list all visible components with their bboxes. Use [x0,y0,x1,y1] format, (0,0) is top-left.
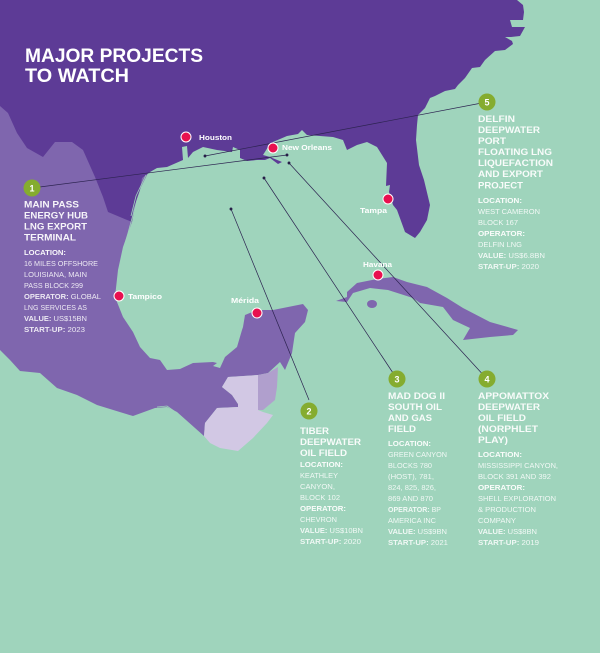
city labels: New Orleans [282,143,332,152]
project 2: CANYON, [300,484,335,491]
project 2: DEEPWATER [300,437,362,447]
title: MAJOR PROJECTS [25,45,203,67]
project 2: OPERATOR: [300,506,346,513]
map: Belize [258,367,278,410]
project 1 [24,180,101,334]
project 3: (HOST), 781, [388,474,434,481]
project 4: MISSISSIPPI CANYON, [478,463,558,470]
project 5: PORT [478,136,507,146]
project 1: 16 MILES OFFSHORE [24,261,98,268]
project 3: AND GAS [388,413,432,423]
project 1: LNG SERVICES AS [24,305,87,312]
project 2: KEATHLEY [300,473,338,480]
project 3: START-UP: 2021 [388,540,448,547]
project 3: VALUE: US$9BN [388,529,447,536]
project 3: 869 AND 870 [388,496,433,503]
project 3: 3 [394,374,400,384]
project 3: 824, 825, 826, [388,485,436,492]
leader lines [32,102,487,400]
project 4: DEEPWATER [478,402,541,412]
project 1: TERMINAL [24,232,77,242]
project 1: LNG EXPORT [24,222,88,232]
project 3: AMERICA INC [388,518,436,525]
project 2: CHEVRON [300,517,337,524]
project 5: DELFIN LNG [478,242,522,249]
project 4: VALUE: US$8BN [478,529,537,536]
project 2: START-UP: 2020 [300,539,361,546]
project 5: OPERATOR: [478,231,525,238]
city markers [114,132,393,318]
project 4: PLAY) [478,435,508,445]
project 3: MAD DOG II [388,391,445,401]
project 5: START-UP: 2020 [478,264,539,271]
project 3: FIELD [388,424,417,434]
project 3: OPERATOR: BP [388,507,441,514]
project 4: SHELL EXPLORATION [478,496,556,503]
project 4: LOCATION: [478,452,522,459]
project 1: OPERATOR: GLOBAL [24,294,101,301]
city labels: Tampico [128,292,162,301]
city labels: Mérida [231,296,260,305]
project 1: START-UP: 2023 [24,327,85,334]
project 2: TIBER [300,426,330,436]
project 5: VALUE: US$6.8BN [478,253,545,260]
project 5: PROJECT [478,180,524,190]
project 1: PASS BLOCK 299 [24,283,83,290]
project 5: LIQUEFACTION [478,158,553,168]
map: United States [0,0,525,238]
project 4: (NORPHLET [478,424,539,434]
project 1: LOCATION: [24,250,66,257]
project 1: 1 [29,184,35,194]
project 2: BLOCK 102 [300,495,340,502]
project 5 [478,94,553,271]
project 5: FLOATING LNG [478,147,552,157]
project 5: 5 [484,98,490,108]
project 2: OIL FIELD [300,448,348,458]
project 4: START-UP: 2019 [478,540,539,547]
project 1: ENERGY HUB [24,210,89,220]
project 1: MAIN PASS [24,200,79,210]
project 3 [388,370,448,547]
project 4 [478,370,558,547]
title [25,45,203,87]
project 4: OPERATOR: [478,485,525,492]
project 3: BLOCKS 780 [388,463,432,470]
map: Mexico [0,100,308,436]
project 3: SOUTH OIL [388,402,443,412]
map: Cuba [336,277,518,340]
city labels: Tampa [360,206,388,215]
project 2: LOCATION: [300,462,343,469]
project 2 [300,402,363,546]
project 4: COMPANY [478,518,516,525]
project 5: DELFIN [478,114,515,124]
project 5: WEST CAMERON [478,209,540,216]
city labels [128,133,393,305]
title: TO WATCH [25,65,129,87]
city labels: Havana [363,260,393,269]
project 5: DEEPWATER [478,125,541,135]
map: coastal lagoons [122,175,177,413]
project 2: VALUE: US$10BN [300,528,363,535]
project 4: BLOCK 391 AND 392 [478,474,551,481]
city labels: Houston [199,133,232,142]
project 1: VALUE: US$15BN [24,316,87,323]
project 4: APPOMATTOX [478,391,549,401]
project 3: GREEN CANYON [388,452,447,459]
project 5: LOCATION: [478,198,522,205]
project 2: 2 [306,406,312,416]
project 3: LOCATION: [388,441,431,448]
project 5: BLOCK 167 [478,220,518,227]
project 1: LOUISIANA, MAIN [24,272,87,279]
project 5: AND EXPORT [478,169,544,179]
project 4: 4 [484,374,490,384]
project 4: & PRODUCTION [478,507,536,514]
map: Guatemala [204,375,273,451]
project 4: OIL FIELD [478,413,527,423]
